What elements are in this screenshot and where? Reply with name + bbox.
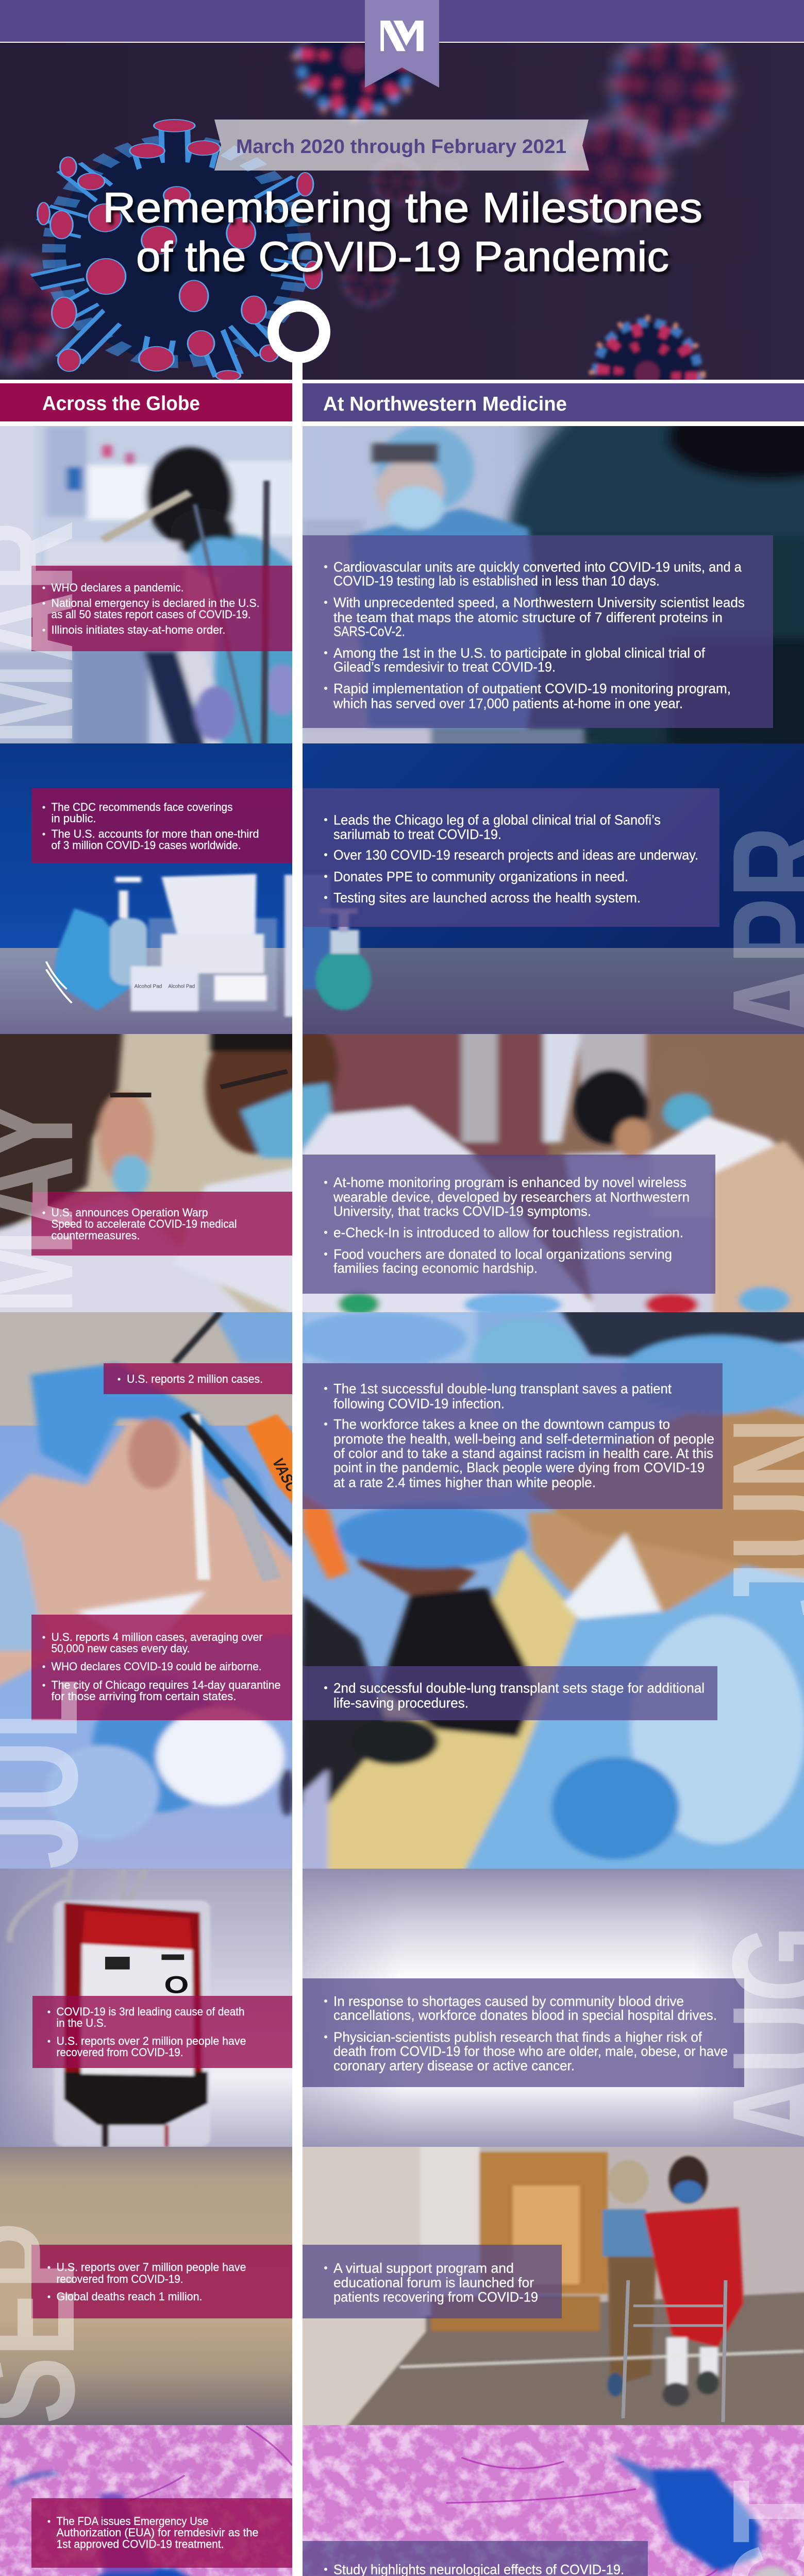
photo: volunteers delivering boxes bbox=[287, 1028, 804, 1319]
callout box bbox=[303, 2245, 562, 2318]
bullet list: Donates PPE to community organizations in need. bbox=[333, 869, 628, 884]
photo: two masked people talking bbox=[0, 1020, 308, 1319]
bullet list: WHO declares a pandemic. bbox=[52, 581, 183, 594]
callout box: July bbox=[303, 1666, 717, 1720]
photo: stained neuron bbox=[0, 2425, 303, 2576]
column header: Across the Globe bbox=[0, 383, 292, 421]
panel: September, at Northwestern bbox=[297, 2142, 804, 2430]
bullet list: sarilumab to treat COVID-19. bbox=[333, 826, 501, 842]
bullet list: Illinois initiates stay-at-home order. bbox=[52, 623, 226, 636]
bullet list: At-home monitoring program is enhanced by novel wireless bbox=[333, 1175, 686, 1190]
bullet list: With unprecedented speed, a Northwestern University scientist leads bbox=[333, 595, 745, 610]
photo: transplant surgeons at microscope bbox=[292, 1308, 804, 1875]
bullet list: July: 2nd successful double-lung transplant sets stage for additional bbox=[333, 1681, 705, 1696]
panel: August, at Northwestern bbox=[303, 1869, 804, 2147]
photo: clinician with face shield bbox=[303, 426, 804, 743]
bullet list: COVID-19 is 3rd leading cause of death bbox=[57, 2005, 244, 2018]
bullet list: Food vouchers are donated to local organizations serving bbox=[333, 1247, 672, 1262]
bullet list: June: U.S. reports 2 million cases. bbox=[127, 1372, 263, 1385]
bullet list: July: 50,000 new cases every day. bbox=[52, 1642, 190, 1655]
bullet list: educational forum is launched for bbox=[333, 2275, 534, 2291]
panel: August, across the globe bbox=[0, 1869, 292, 2147]
bullet list bbox=[324, 1175, 690, 1276]
photo: masks and sanitizer on table bbox=[0, 743, 295, 1034]
bullet list: coronary artery disease or active cancer. bbox=[333, 2058, 575, 2073]
photo: patient walking in hallway bbox=[297, 2142, 804, 2430]
bullet list: July: WHO declares COVID-19 could be airborne. bbox=[52, 1660, 262, 1673]
callout box bbox=[303, 535, 773, 728]
photo: stained neuron bbox=[303, 2425, 804, 2576]
bullet list bbox=[47, 2261, 246, 2303]
bullet list: Cardiovascular units are quickly converted into COVID-19 units, and a bbox=[333, 560, 742, 575]
ribbon with NM logo bbox=[365, 0, 439, 88]
bullet list bbox=[47, 2005, 246, 2059]
bullet list: of 3 million COVID-19 cases worldwide. bbox=[52, 839, 241, 852]
bullet list: July bbox=[324, 1681, 705, 1710]
bullet list: The FDA issues Emergency Use bbox=[57, 2515, 208, 2528]
bullet list: Gilead’s remdesivir to treat COVID-19. bbox=[333, 659, 556, 675]
panel: October, across the globe bbox=[0, 2425, 303, 2576]
bullet list: National emergency is declared in the U.S. bbox=[52, 597, 260, 609]
bullet list: Global deaths reach 1 million. bbox=[57, 2290, 202, 2303]
bullet list: the team that maps the atomic structure of 7 different proteins in bbox=[333, 610, 723, 625]
bullet list: e-Check-In is introduced to allow for touchless registration. bbox=[333, 1225, 683, 1241]
photo: blood bag bbox=[0, 1869, 292, 2147]
callout box bbox=[31, 2245, 292, 2318]
photo: surgeon close-up bbox=[0, 1308, 303, 1869]
bullet list: families facing economic hardship. bbox=[333, 1260, 538, 1276]
bullet list: death from COVID-19 for those who are older, male, obese, or have bbox=[333, 2043, 728, 2059]
photo: blood bag: O bbox=[164, 1971, 189, 1998]
panel: June and July, across the globe bbox=[0, 1308, 303, 1869]
bullet list bbox=[42, 801, 259, 852]
bullet list: The CDC recommends face coverings bbox=[52, 801, 233, 814]
bullet list: in the U.S. bbox=[57, 2016, 106, 2029]
callout box bbox=[303, 1155, 715, 1294]
photo: masks and sanitizer on table: Alcohol Pad bbox=[168, 984, 195, 989]
bullet list: recovered from COVID-19. bbox=[57, 2273, 183, 2285]
bullet list bbox=[324, 560, 745, 711]
bullet list: June: The 1st successful double-lung transplant saves a patient bbox=[333, 1381, 672, 1396]
bullet list: which has served over 17,000 patients at-home in one year. bbox=[333, 696, 683, 711]
bullet list: University, that tracks COVID-19 symptoms. bbox=[333, 1204, 591, 1219]
title: Remembering the Milestones bbox=[103, 184, 702, 231]
bullet list: countermeasures. bbox=[52, 1229, 140, 1242]
bullet list: Speed to accelerate COVID-19 medical bbox=[52, 1217, 237, 1230]
bullet list: June: of color and to take a stand against racism in health care. At this bbox=[333, 1446, 713, 1461]
title bbox=[103, 184, 702, 280]
callout box bbox=[31, 1192, 292, 1256]
panel: May, at Northwestern bbox=[287, 1028, 804, 1319]
bullet list: wearable device, developed by researchers at Northwestern bbox=[333, 1189, 690, 1205]
bullet list: June bbox=[324, 1381, 714, 1490]
callout box bbox=[303, 788, 719, 927]
bullet list: Physician-scientists publish research that finds a higher risk of bbox=[333, 2029, 702, 2045]
bullet list bbox=[42, 581, 260, 636]
bullet list: as all 50 states report cases of COVID-19. bbox=[52, 608, 250, 621]
bullet list: June: following COVID-19 infection. bbox=[333, 1396, 505, 1412]
photo: masks and sanitizer on table: Alcohol Pad bbox=[135, 984, 162, 989]
column header: At Northwestern Medicine bbox=[303, 383, 804, 421]
bullet list bbox=[47, 2515, 259, 2550]
column header: Across the Globe: Across the Globe bbox=[42, 393, 200, 415]
photo: soap bottle on table bbox=[303, 743, 804, 1034]
photo: tan wall bbox=[0, 2147, 292, 2425]
callout box bbox=[31, 566, 292, 651]
callout box: June bbox=[303, 1363, 723, 1509]
bullet list bbox=[324, 1994, 728, 2073]
bullet list: Leads the Chicago leg of a global clinical trial of Sanofi’s bbox=[333, 812, 661, 827]
bullet list: July: U.S. reports 4 million cases, averaging over bbox=[52, 1631, 263, 1643]
panel: March, at Northwestern bbox=[303, 426, 804, 743]
photo: soft white backdrop bbox=[303, 1869, 804, 2147]
bullet list: July: life-saving procedures. bbox=[333, 1695, 468, 1710]
bullet list: Testing sites are launched across the health system. bbox=[333, 890, 641, 906]
bullet list: July bbox=[42, 1631, 281, 1703]
bullet list: June: promote the health, well-being and self-determination of people bbox=[333, 1431, 714, 1447]
panel: April, across the globe bbox=[0, 743, 295, 1034]
panel: March, across the globe bbox=[0, 418, 303, 750]
callout box bbox=[32, 1996, 292, 2068]
bullet list: June: at a rate 2.4 times higher than white people. bbox=[333, 1475, 596, 1490]
bullet list: in public. bbox=[52, 812, 96, 825]
bullet list: U.S. reports over 7 million people have bbox=[57, 2261, 246, 2274]
column header: At Northwestern Medicine: At Northwestern Medicine bbox=[323, 393, 567, 415]
panel: October, at Northwestern bbox=[303, 2425, 804, 2576]
bullet list: A virtual support program and bbox=[333, 2261, 514, 2276]
photo: ICU clinician bbox=[0, 418, 303, 750]
callout box bbox=[31, 2498, 292, 2568]
date banner bbox=[214, 120, 589, 171]
bullet list: Rapid implementation of outpatient COVID-19 monitoring program, bbox=[333, 681, 731, 697]
bullet list bbox=[324, 2261, 538, 2305]
bullet list: Over 130 COVID-19 research projects and ideas are underway. bbox=[333, 847, 698, 862]
callout box: July bbox=[31, 1615, 292, 1720]
bullet list: June: The workforce takes a knee on the downtown campus to bbox=[333, 1417, 670, 1432]
bullet list: July: for those arriving from certain states. bbox=[52, 1690, 236, 1703]
bullet list: U.S. announces Operation Warp bbox=[52, 1206, 208, 1219]
date banner: March 2020 through February 2021 bbox=[236, 136, 566, 158]
photo: surgeon close-up: VASC bbox=[268, 1456, 302, 1494]
divider under hero bbox=[0, 380, 804, 383]
bullet list: Among the 1st in the U.S. to participate in global clinical trial of bbox=[333, 645, 705, 660]
panel: May, across the globe bbox=[0, 1034, 292, 1312]
panel: June and July, at Northwestern bbox=[292, 1308, 804, 1875]
bullet list bbox=[42, 1206, 237, 1242]
callout box: June bbox=[104, 1363, 292, 1394]
bullet list: SARS-CoV-2. bbox=[333, 623, 405, 639]
hero image: coronavirus particles bbox=[0, 43, 740, 380]
hero panel bbox=[0, 43, 804, 380]
bullet list: recovered from COVID-19. bbox=[57, 2046, 183, 2059]
panel: April, at Northwestern bbox=[303, 743, 804, 1037]
bullet list: July: The city of Chicago requires 14-day quarantine bbox=[52, 1679, 280, 1691]
top purple bar bbox=[0, 0, 804, 42]
bullet list: 1st approved COVID-19 treatment. bbox=[57, 2538, 224, 2550]
bullet list: The U.S. accounts for more than one-third bbox=[52, 827, 259, 840]
bullet list: In response to shortages caused by community blood drive bbox=[333, 1994, 684, 2009]
bullet list: Authorization (EUA) for remdesivir as the bbox=[57, 2526, 259, 2539]
panel: September, across the globe bbox=[0, 2147, 292, 2425]
timeline ring marker bbox=[273, 306, 325, 426]
callout box bbox=[303, 2541, 648, 2576]
bullet list: June: point in the pandemic, Black people were dying from COVID-19 bbox=[333, 1460, 705, 1476]
callout box bbox=[31, 788, 292, 863]
bullet list: COVID-19 testing lab is established in less than 10 days. bbox=[333, 573, 660, 588]
title: of the COVID-19 Pandemic bbox=[136, 233, 669, 280]
bullet list bbox=[324, 812, 698, 906]
callout box bbox=[303, 1978, 744, 2087]
bullet list: cancellations, workforce donates blood in special hospital drives. bbox=[333, 2007, 717, 2023]
bullet list: U.S. reports over 2 million people have bbox=[57, 2035, 246, 2047]
bullet list: patients recovering from COVID-19 bbox=[333, 2290, 538, 2305]
